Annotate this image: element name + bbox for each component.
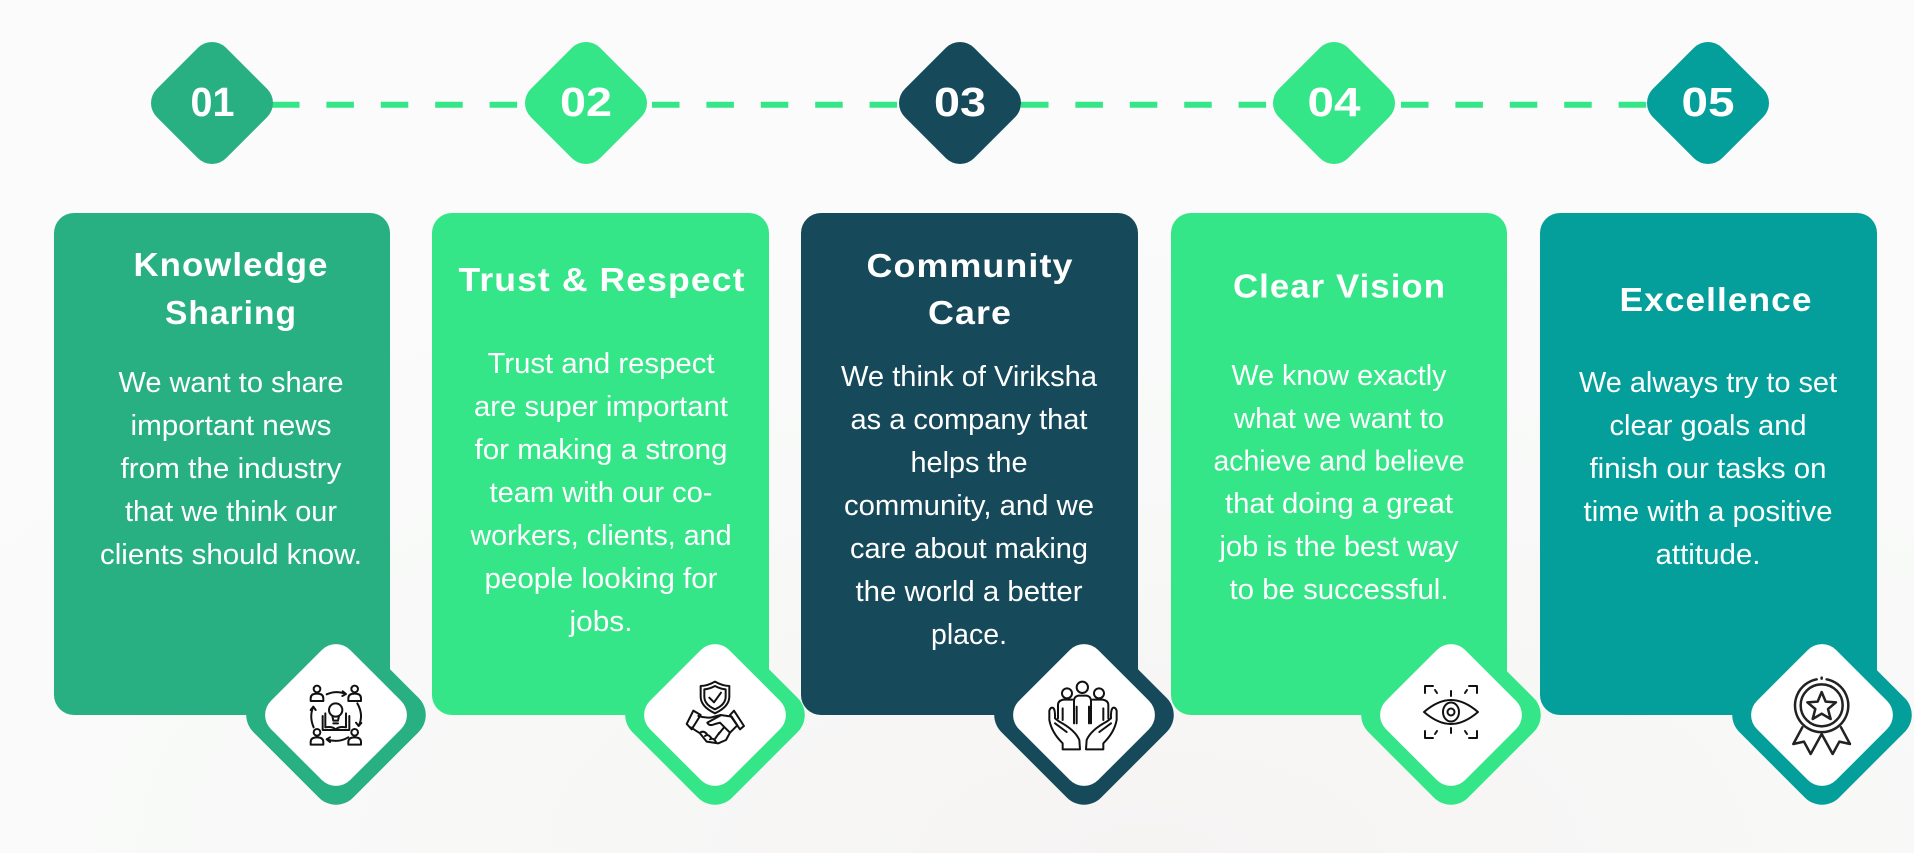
badge: trust handshake icon xyxy=(615,615,815,815)
panel: Trust & Respect: jobs. xyxy=(568,606,632,638)
panel: Trust & Respect: team with our co- xyxy=(490,477,712,509)
badge: knowledge sharing icon xyxy=(236,615,436,815)
panel: Community Care: as a company that xyxy=(850,404,1088,436)
step marker 02 xyxy=(517,34,655,172)
panel: Community Care: care about making xyxy=(850,533,1088,565)
panel: Excellence: time with a positive xyxy=(1584,496,1832,528)
panel: Excellence: clear goals and xyxy=(1610,410,1806,442)
panel: Knowledge Sharing: that we think our xyxy=(125,496,338,528)
panel: Knowledge Sharing xyxy=(54,213,390,715)
panel: Excellence: finish our tasks on xyxy=(1590,453,1826,485)
panel: Trust & Respect xyxy=(432,213,769,715)
panel: Clear Vision: to be successful. xyxy=(1230,574,1448,606)
panel: Community Care: We think of Viriksha xyxy=(841,361,1097,393)
panel: Clear Vision: achieve and believe xyxy=(1214,446,1464,478)
badge: clear vision icon xyxy=(1351,615,1551,815)
panel: Knowledge Sharing: from the industry xyxy=(120,453,342,485)
panel: Knowledge Sharing: Knowledge xyxy=(134,246,328,283)
panel: Trust & Respect: for making a strong xyxy=(474,434,728,466)
step marker 01: 01 xyxy=(190,79,234,125)
panel: Knowledge Sharing: clients should know. xyxy=(100,539,362,571)
icon: award ribbon with star xyxy=(1793,678,1850,754)
panel: Excellence xyxy=(1540,213,1877,715)
step marker 04 xyxy=(1265,34,1403,172)
dashed timeline connector xyxy=(272,102,1650,108)
panel: Knowledge Sharing: important news xyxy=(130,410,332,442)
panel: Trust & Respect: people looking for xyxy=(484,563,718,595)
panel: Knowledge Sharing: We want to share xyxy=(118,367,344,399)
step marker 04: 04 xyxy=(1308,79,1361,125)
panel: Clear Vision: what we want to xyxy=(1233,403,1444,435)
panel: Community Care: Care xyxy=(928,294,1012,331)
panel: Trust & Respect: workers, clients, and xyxy=(469,520,732,552)
icon: eye in focus frame xyxy=(1424,686,1478,738)
panel: Community Care: Community xyxy=(866,247,1074,284)
panel: Clear Vision: Clear Vision xyxy=(1233,268,1446,304)
panel: Trust & Respect: Trust & Respect xyxy=(458,261,746,298)
panel: Excellence: Excellence xyxy=(1620,281,1812,318)
badge: community care icon xyxy=(984,615,1184,815)
panel: Community Care: the world a better xyxy=(856,576,1083,608)
panel: Community Care: place. xyxy=(931,619,1007,651)
step marker 01 xyxy=(143,34,281,172)
panel: Clear Vision: that doing a great xyxy=(1225,488,1453,520)
step marker 03: 03 xyxy=(934,79,986,125)
step marker 03 xyxy=(891,34,1029,172)
icon: shield above handshake xyxy=(687,682,744,743)
step marker 02: 02 xyxy=(560,79,612,125)
panel: Excellence: attitude. xyxy=(1656,539,1760,571)
step marker 05 xyxy=(1639,34,1777,172)
panel: Community Care xyxy=(801,213,1138,715)
panel: Community Care: community, and we xyxy=(844,490,1094,522)
panel: Excellence: We always try to set xyxy=(1579,367,1837,399)
badge: excellence icon xyxy=(1722,615,1914,815)
panel: Trust & Respect: Trust and respect xyxy=(488,348,715,380)
step marker 05: 05 xyxy=(1682,79,1734,125)
panel: Clear Vision: We know exactly xyxy=(1232,360,1447,392)
icon: people sharing ideas around a bulb and book xyxy=(311,686,361,745)
icon: hands holding people xyxy=(1049,682,1117,749)
panel: Trust & Respect: are super important xyxy=(474,391,728,423)
panel: Knowledge Sharing: Sharing xyxy=(165,294,297,331)
panel: Clear Vision xyxy=(1171,213,1507,715)
panel: Clear Vision: job is the best way xyxy=(1218,531,1459,563)
panel: Community Care: helps the xyxy=(910,447,1028,479)
